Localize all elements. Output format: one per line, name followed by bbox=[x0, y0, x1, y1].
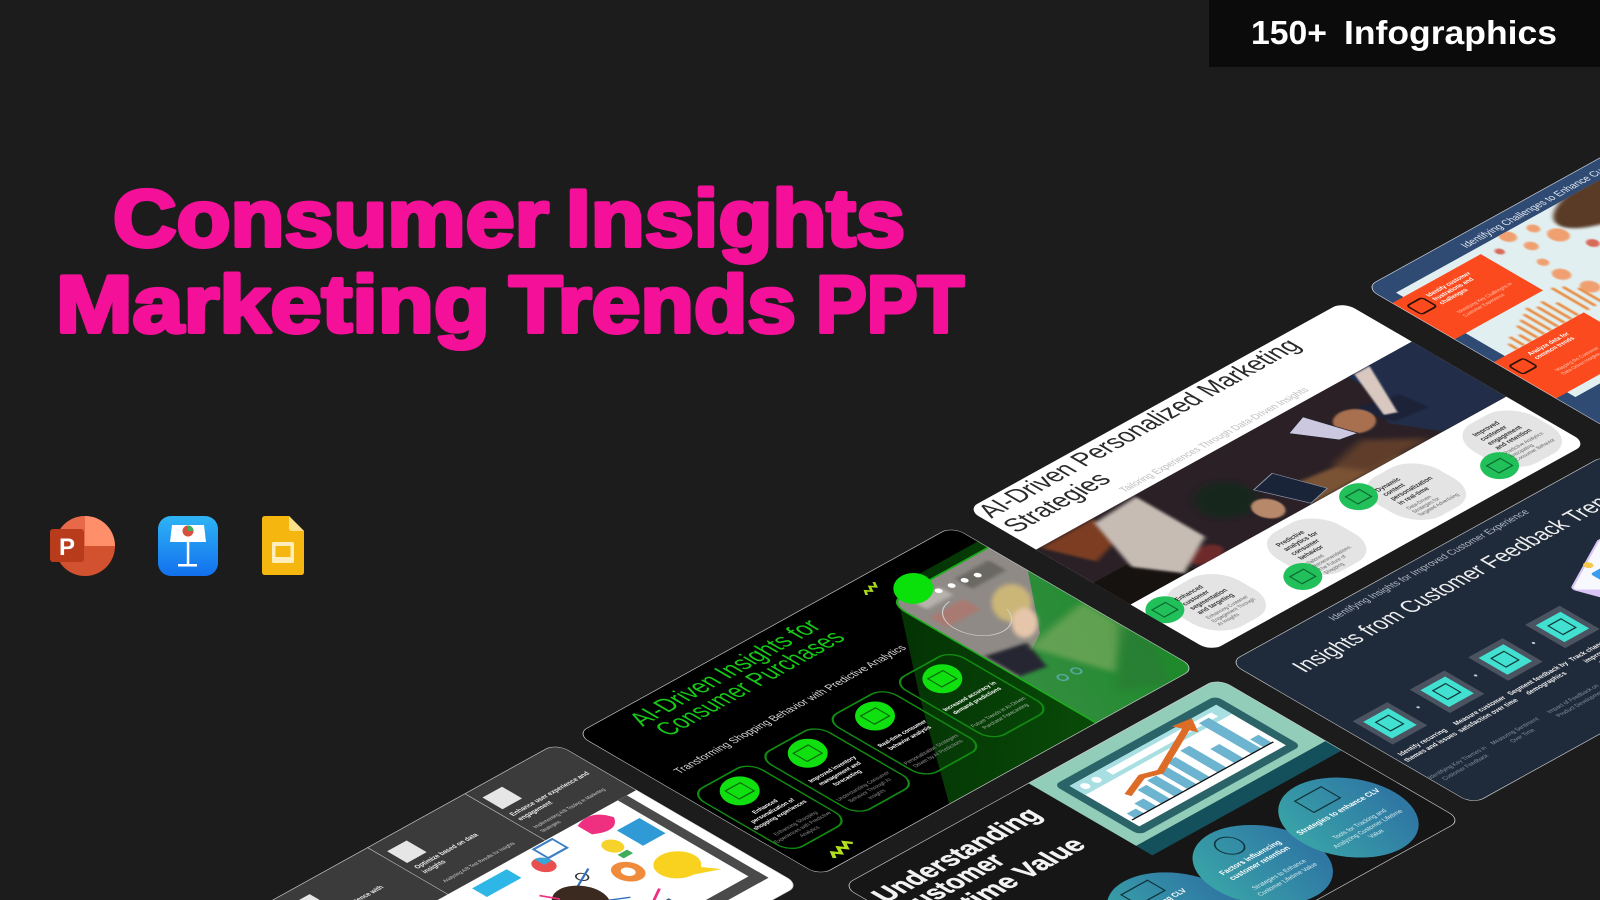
panel: Identifying Challenges slide (orange) bbox=[1372, 158, 1600, 424]
icon: Google Slides bbox=[262, 516, 304, 575]
heading: Consumer Purchases bbox=[649, 627, 852, 740]
column 3 text: engagement bbox=[516, 800, 555, 822]
card 2: Tailored bbox=[1306, 554, 1326, 566]
card 1: Customer Experience bbox=[1462, 293, 1507, 318]
column 3 text bbox=[509, 771, 606, 832]
title: Consumer bbox=[113, 174, 549, 264]
title: Marketing bbox=[56, 260, 490, 350]
step 1: Identify recurring bbox=[1397, 728, 1449, 757]
card 1: customer bbox=[1181, 589, 1212, 607]
card 3: Driven by AI Predictions bbox=[912, 739, 966, 769]
card 3: behavior analysis bbox=[886, 725, 934, 751]
connector dots bbox=[1415, 642, 1536, 709]
circle 2 bbox=[1164, 809, 1362, 900]
panel: AI-Driven Insights for Consumer Purchases (green slide) bbox=[576, 526, 1196, 876]
card 1: AI Insights bbox=[1216, 612, 1242, 627]
card 3: in real-time bbox=[1396, 486, 1432, 506]
title: Insights bbox=[566, 174, 905, 264]
card 3 bbox=[1339, 464, 1466, 520]
card 2: Analyze data for bbox=[1526, 331, 1572, 357]
column 2 text: Analyzing A/B Test Results for Insights bbox=[441, 841, 518, 884]
circle 3: Strategies to enhance CLV bbox=[1294, 787, 1383, 836]
heading: AI-Driven Personalized Marketing bbox=[971, 335, 1308, 522]
badge: 150+ Infographics: 150+ bbox=[1251, 14, 1327, 51]
card 1: Enhanced bbox=[1173, 584, 1206, 603]
card 3: Targeted Advertising bbox=[1417, 493, 1461, 517]
card 4: Anticipating bbox=[1508, 443, 1536, 459]
step 1: Identifying Key Themes in bbox=[1427, 745, 1489, 780]
panel: Insights from Customer Feedback Trends (navy slide) bbox=[1229, 454, 1600, 805]
card 4: Predictive Analytics: bbox=[1503, 431, 1546, 456]
card 3: personalization bbox=[1389, 476, 1435, 502]
card 2: Shopping bbox=[1323, 562, 1346, 575]
column dividers bbox=[368, 794, 546, 894]
squiggle top bbox=[864, 582, 878, 595]
illustration panel bbox=[438, 790, 794, 900]
icon: Keynote bbox=[158, 516, 218, 576]
column 3 text: Enhance user experience and bbox=[508, 771, 592, 817]
step 3: Segment feedback by bbox=[1506, 661, 1571, 697]
card 3: Personalization Strategies bbox=[903, 734, 961, 766]
badge: 150+ Infographics: Infographics bbox=[1344, 14, 1557, 51]
slide border bbox=[842, 678, 1462, 900]
card 1 bbox=[1392, 254, 1543, 339]
photo frame line bbox=[896, 546, 1097, 724]
step 3 bbox=[1456, 632, 1600, 721]
card 2: Improved inventory bbox=[807, 755, 859, 784]
step 2: Measuring Sentiment bbox=[1489, 716, 1542, 746]
card 2: forecasting bbox=[831, 769, 864, 787]
title: Trends bbox=[509, 260, 796, 350]
photo: shopper bbox=[889, 548, 1196, 723]
card 1: challenges bbox=[1438, 287, 1471, 306]
card 1: Engagement Through bbox=[1210, 597, 1258, 624]
card 1: Experiences with Predictive bbox=[773, 811, 834, 845]
card 4: engagement bbox=[1486, 425, 1525, 447]
circle 3: Tools for Tracking and bbox=[1331, 808, 1389, 840]
slide border bbox=[1372, 158, 1600, 424]
badge: 150+ Infographics bbox=[1209, 0, 1600, 67]
photo: meeting bbox=[1036, 342, 1509, 606]
card 2: Predictive bbox=[1275, 530, 1307, 548]
card 1 bbox=[697, 766, 843, 849]
step 2: Measure customer bbox=[1452, 695, 1509, 727]
card 2: Recommendations: bbox=[1311, 545, 1354, 569]
card 3: Data-Driven bbox=[1405, 495, 1434, 511]
slide border bbox=[1229, 454, 1600, 805]
card 1: personalization of bbox=[749, 797, 798, 824]
panel: bottom-left A/B testing slide bbox=[272, 746, 794, 900]
panel: Understanding Customer Lifetime Value (teal slide) bbox=[842, 678, 1462, 900]
card 2: Behavior Through AI bbox=[847, 777, 894, 804]
circle 2: Strategies to Enhance bbox=[1251, 858, 1309, 891]
card 3: content bbox=[1381, 482, 1408, 497]
card 4: Consumer Behavior bbox=[1514, 438, 1558, 462]
heading: AI-Driven Insights for bbox=[622, 615, 828, 730]
card 1: Identify customer bbox=[1424, 271, 1474, 298]
card 2: The Future of bbox=[1317, 554, 1349, 572]
card 4: and retention bbox=[1493, 428, 1534, 451]
circle 3: Value bbox=[1367, 828, 1387, 839]
circle 2: Customer Lifetime Value bbox=[1256, 862, 1320, 897]
card 2: Insights bbox=[867, 789, 888, 801]
subtitle: Tailoring Experiences Through Data-Driven Insights bbox=[1117, 386, 1312, 494]
circle 2: customer retention bbox=[1226, 845, 1293, 882]
slide border bbox=[576, 526, 1196, 876]
card 2 bbox=[1267, 518, 1366, 590]
column 3 text: Strategies bbox=[539, 820, 563, 834]
step 1: Customer Feedback bbox=[1440, 753, 1492, 781]
icon: PowerPoint bbox=[50, 516, 115, 576]
green gradient background bbox=[900, 542, 1190, 804]
step 2: satisfaction over time bbox=[1456, 698, 1521, 734]
step 2: Over Time bbox=[1508, 727, 1538, 744]
card 2 bbox=[764, 728, 910, 812]
icon tiles bbox=[289, 787, 523, 900]
card 4: Purchase Forecasting bbox=[981, 703, 1031, 730]
circle 3: Analyzing Customer Lifetime bbox=[1332, 809, 1405, 850]
card 4 bbox=[898, 654, 1044, 738]
card 4: Improved bbox=[1471, 421, 1502, 438]
card 2: Mapping the Customer bbox=[1554, 346, 1600, 372]
title: PPT bbox=[816, 260, 964, 350]
card 1 bbox=[1145, 574, 1266, 630]
illustration: lilac cube bbox=[1550, 499, 1600, 634]
card 1: Enhanced bbox=[751, 798, 781, 815]
step 3: Impact of Feedback on bbox=[1545, 683, 1600, 715]
card 4: demand predictions bbox=[951, 686, 1004, 716]
card 2: common trends bbox=[1532, 336, 1577, 361]
card 4: Increased accuracy in bbox=[941, 680, 999, 713]
card 2: consumer bbox=[1289, 538, 1322, 557]
step 2 bbox=[1398, 664, 1555, 754]
card 2: Understanding Consumer bbox=[835, 771, 892, 802]
card 3: Dynamic bbox=[1374, 477, 1403, 493]
slide border bbox=[272, 746, 794, 900]
card 2: management and bbox=[817, 761, 864, 787]
card 2: analytics for bbox=[1282, 531, 1321, 552]
step 1 bbox=[1342, 696, 1497, 785]
card 2: behavior bbox=[1297, 544, 1326, 561]
circle 1 bbox=[1078, 856, 1276, 900]
column 2 text bbox=[414, 834, 515, 882]
card 4 bbox=[1462, 410, 1562, 480]
card 1: Enhancing Customer bbox=[1205, 595, 1251, 620]
step 1: themes and issues bbox=[1403, 731, 1460, 763]
subtitle: Identifying Insights for Improved Customer Experience bbox=[1326, 508, 1533, 623]
squiggle bottom bbox=[830, 840, 853, 858]
card 1: and targeting bbox=[1196, 593, 1236, 616]
card 3: Real-time consumer bbox=[876, 719, 930, 749]
card 1: shopping experiences bbox=[751, 799, 810, 831]
card 1: frustrations and bbox=[1431, 277, 1476, 302]
card 1: segmentation bbox=[1188, 588, 1230, 611]
card 4: customer bbox=[1478, 425, 1510, 442]
panel: AI-Driven Personalized Marketing Strategies (white slide) bbox=[958, 301, 1587, 656]
icon: PowerPoint: P bbox=[59, 534, 75, 561]
green dot bbox=[893, 573, 933, 604]
subtitle: Transforming Shopping Behavior with Predictive Analytics bbox=[671, 643, 910, 776]
card 3: Strategies for bbox=[1411, 497, 1442, 514]
title bbox=[56, 174, 964, 350]
heading: Strategies bbox=[996, 469, 1118, 537]
column 2 text: insights bbox=[421, 859, 448, 875]
card 3 bbox=[832, 691, 978, 774]
card 1: Enhancing Shopping bbox=[773, 811, 820, 837]
card 2 bbox=[1494, 312, 1600, 399]
laptop illustration bbox=[1028, 678, 1342, 855]
step 3: demographics bbox=[1524, 671, 1569, 696]
photo background figures bbox=[1298, 454, 1402, 502]
card 4: Future Trends in AI-Driven bbox=[970, 696, 1028, 729]
column 2 text: Optimize based on data bbox=[413, 832, 481, 870]
card 1: Analytics bbox=[798, 825, 822, 839]
circle 3 bbox=[1249, 761, 1447, 874]
photo: data overlay bbox=[1396, 180, 1600, 397]
step 4 bbox=[1517, 601, 1600, 672]
circle 2: Factors influencing bbox=[1217, 839, 1284, 876]
column 3 text: Implementing A/B Testing in Marketing bbox=[532, 787, 608, 830]
card 1: Identifying Key Challenges in bbox=[1456, 282, 1515, 315]
